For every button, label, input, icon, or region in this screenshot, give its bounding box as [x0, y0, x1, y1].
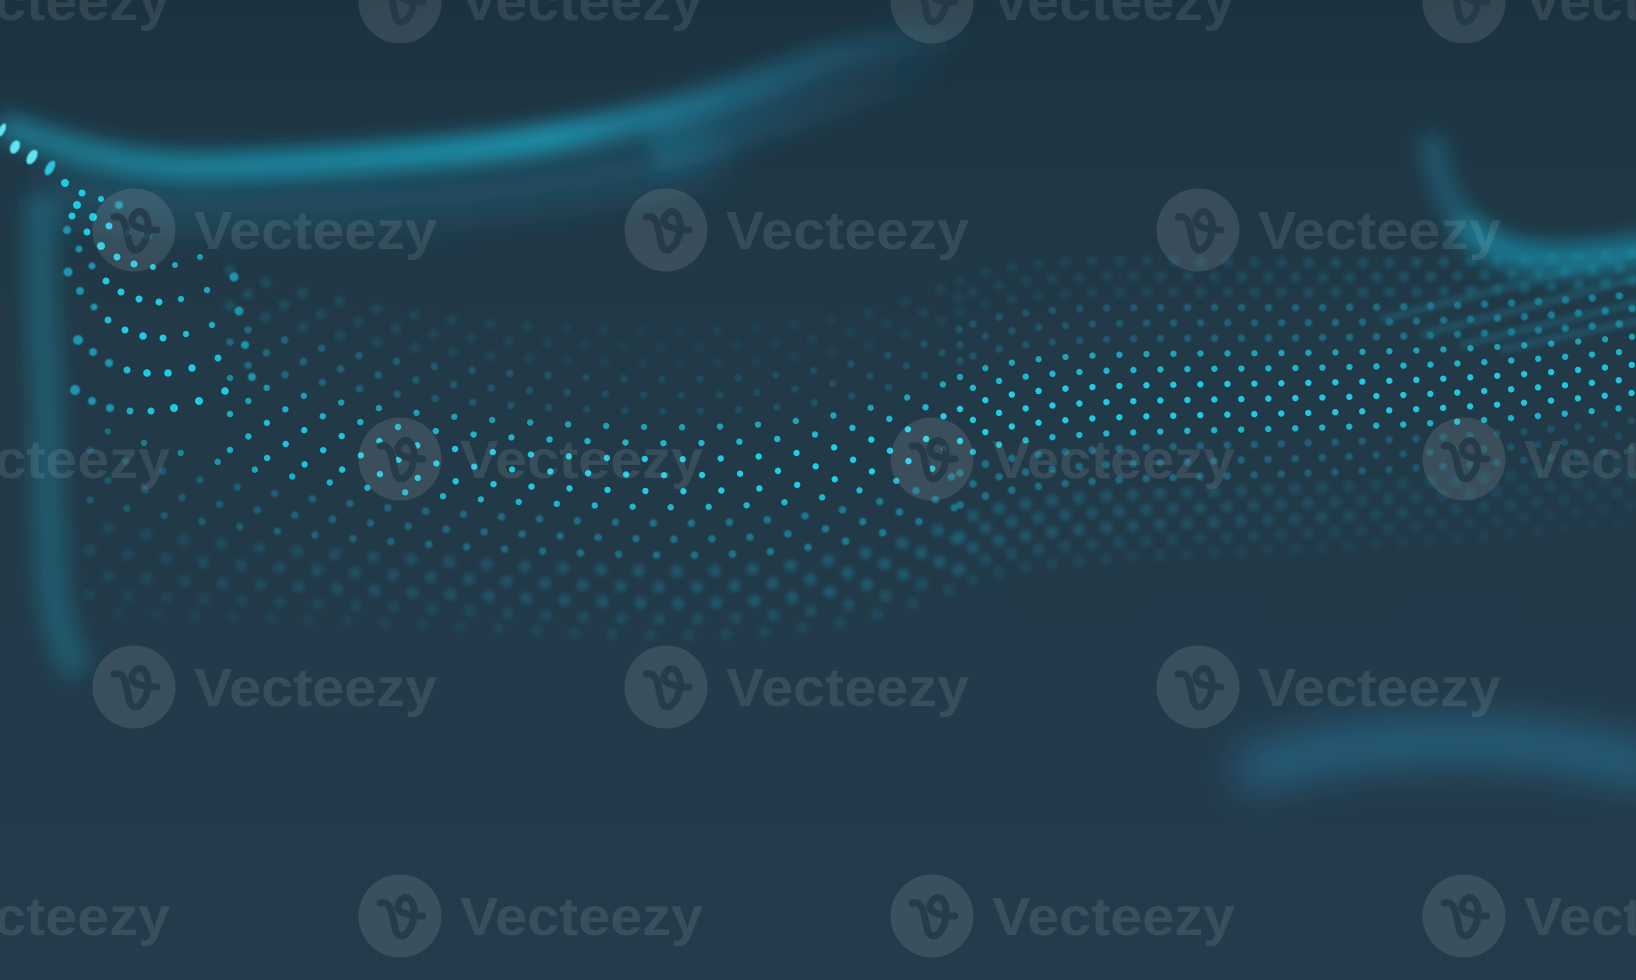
- right blurred rising streaks: [1380, 250, 1636, 350]
- watermark row 4: Vecteezy: [194, 658, 437, 718]
- watermark row 2: Vecteezy: [194, 201, 437, 261]
- watermark row 1: [0, 0, 1636, 44]
- watermark row 2: Vecteezy: [1258, 201, 1501, 261]
- right teal streak: [1430, 136, 1636, 259]
- top teal streak: [0, 40, 970, 167]
- watermark row 3: [0, 418, 1636, 500]
- bottom right streak: [1240, 741, 1636, 775]
- watermark row 2: [92, 188, 1501, 272]
- watermark row 3: Vecteezy: [992, 430, 1235, 490]
- lower dot rows, soft: [90, 420, 1636, 555]
- left vertical streak: [41, 198, 80, 672]
- watermark row 3: Vecteezy: [460, 430, 703, 490]
- bright focused dot rows: [90, 336, 1636, 507]
- watermark row 5: [0, 874, 1636, 958]
- watermark row 2: Vecteezy: [726, 201, 969, 261]
- upper dot rows, soft: [230, 294, 1636, 411]
- far lower dot rows, blurred: [90, 462, 1636, 635]
- watermark row 5: Vecteezy: [460, 887, 703, 947]
- top-left glowing dots: [0, 122, 57, 177]
- far upper dot rows, blurred: [230, 252, 1636, 363]
- left bright arcs of dots: [61, 179, 256, 414]
- watermark row 4: Vecteezy: [726, 658, 969, 718]
- watermark row 5: Vecteezy: [992, 887, 1235, 947]
- watermark row 4: Vecteezy: [1258, 658, 1501, 718]
- watermark row 4: [92, 646, 1501, 728]
- blurred haze under top streak: [40, 150, 720, 203]
